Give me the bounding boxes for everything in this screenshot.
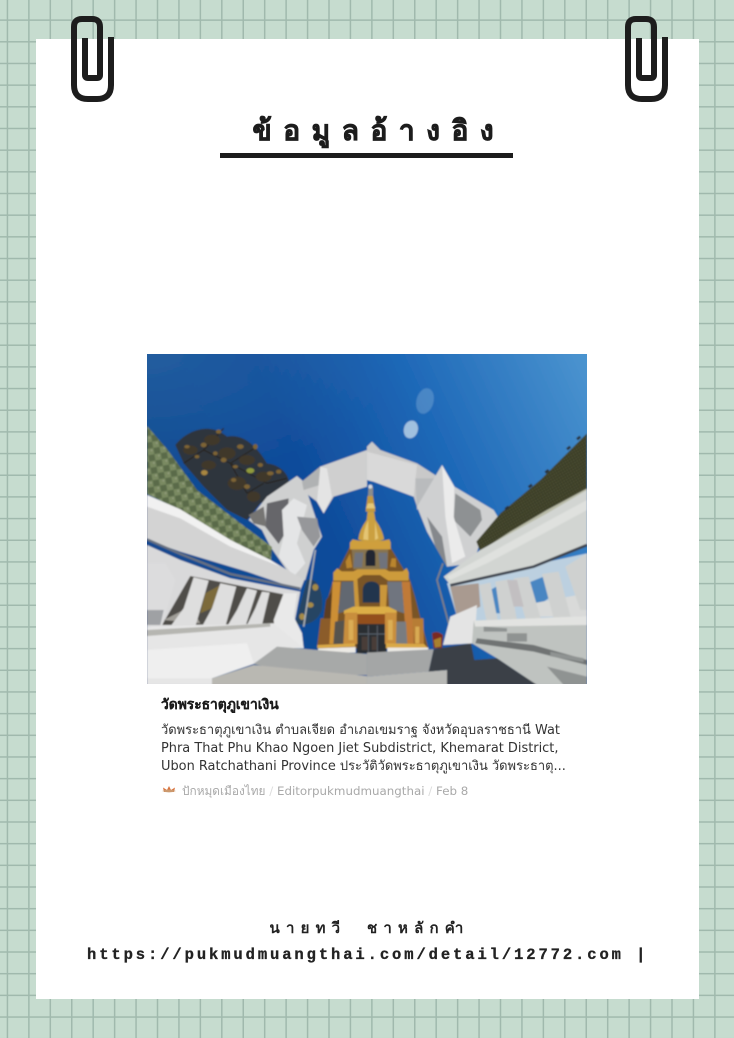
article excerpt: Ubon Ratchathani Province ประวัติวัดพระธาตุภูเขาเงิน วัดพระธาตุ... bbox=[161, 759, 566, 774]
article excerpt bbox=[161, 723, 566, 774]
article title: วัดพระธาตุภูเขาเงิน bbox=[161, 697, 279, 712]
article excerpt: วัดพระธาตุภูเขาเงิน ตำบลเจียด อำเภอเขมราฐ จังหวัดอุบลราชธานี Wat bbox=[161, 723, 560, 738]
author name: นายทวี ชาหลักคำ bbox=[270, 920, 469, 937]
panel: link preview card bbox=[147, 354, 587, 798]
icon: right paper clip bbox=[625, 16, 668, 102]
photo: Wat Phra That Phu Khao Ngoen bbox=[147, 354, 587, 684]
source URL: https://pukmudmuangthai.com/detail/12772.com | bbox=[87, 946, 648, 964]
icon: site logo bbox=[162, 786, 176, 792]
title underline bbox=[220, 153, 513, 158]
title: ข้อมูลอ้างอิง bbox=[252, 115, 505, 146]
icon: left paper clip bbox=[71, 16, 114, 102]
source and date: ปักหมุดเมืองไทย / Editorpukmudmuangthai / Feb 8 bbox=[182, 784, 468, 798]
article excerpt: Phra That Phu Khao Ngoen Jiet Subdistrict, Khemarat District, bbox=[161, 741, 558, 756]
